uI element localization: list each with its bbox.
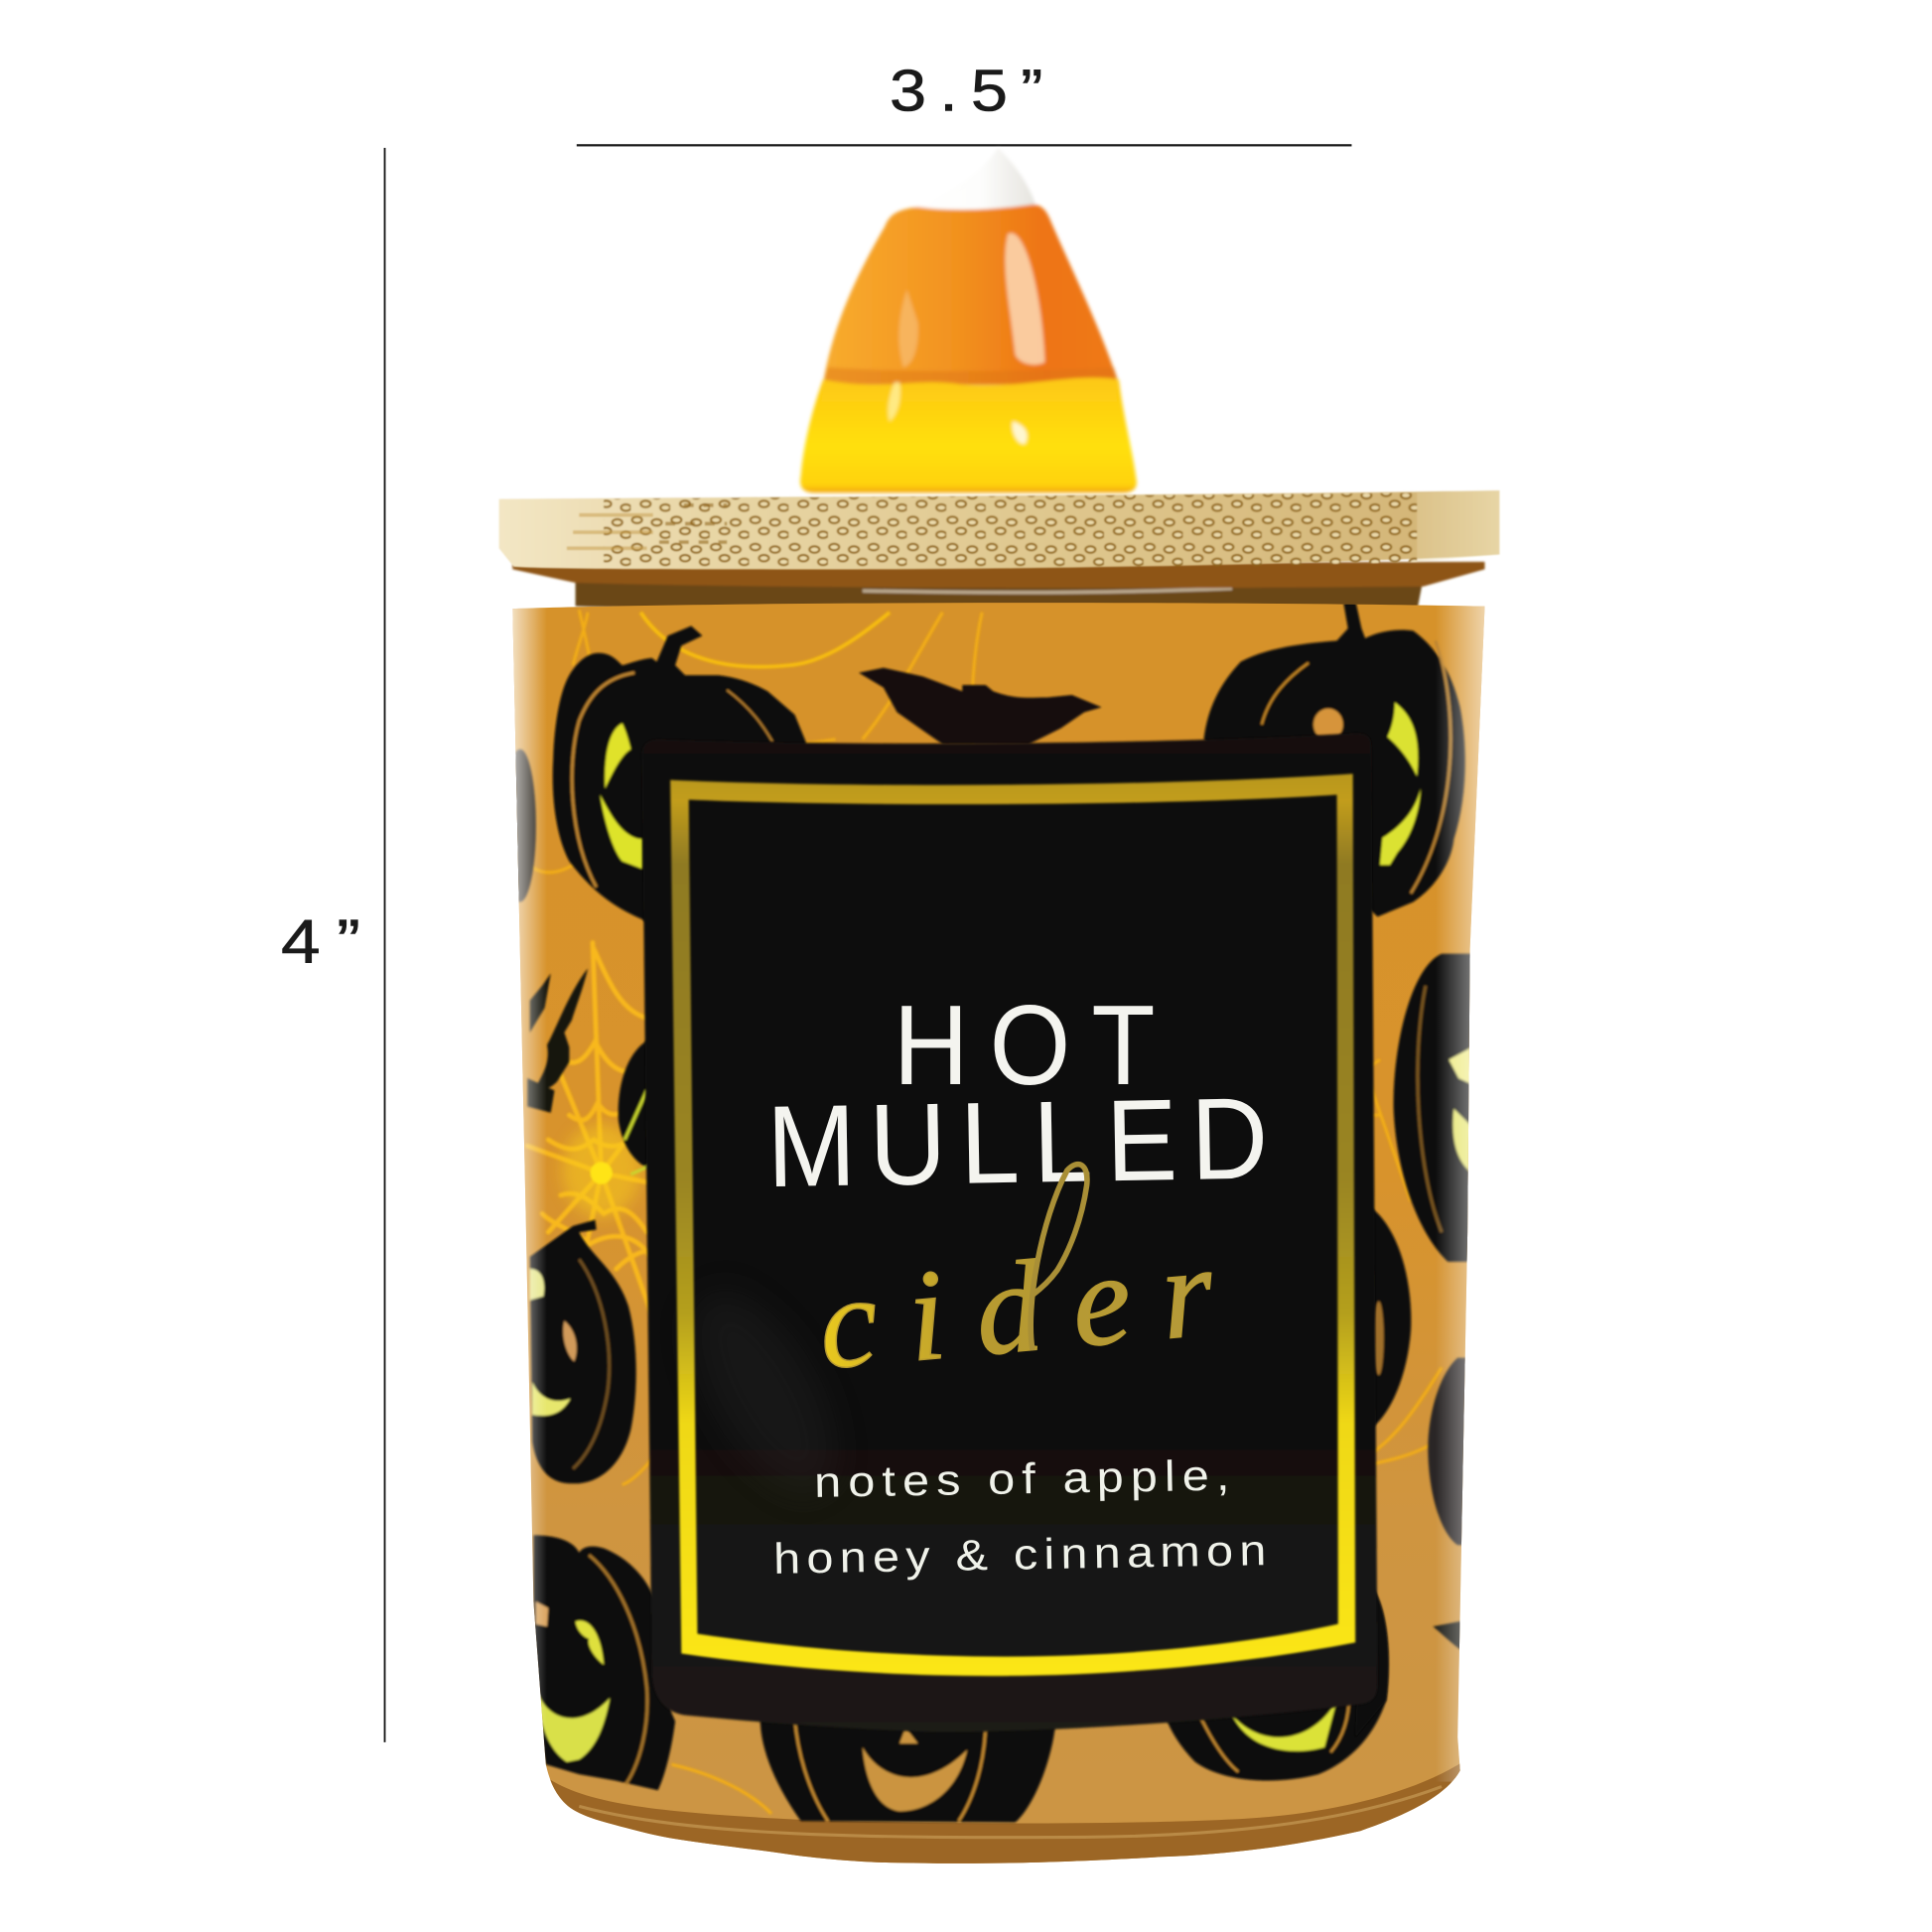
text: HOT: HOT (894, 983, 1156, 1109)
jar glass base colour (505, 599, 1491, 1872)
icon: spider web left (527, 942, 653, 1318)
icon: bat right (1432, 1620, 1459, 1650)
height dimension line (384, 148, 385, 1742)
icon: pumpkin top right (1204, 600, 1465, 916)
bamboo lid (499, 490, 1499, 570)
icon: bats left (527, 968, 588, 1113)
icon: pumpkin left bottom (533, 1535, 675, 1790)
icon: pumpkin left edge (515, 749, 538, 903)
icon: pumpkin right lower (1426, 1356, 1465, 1547)
jar body with pumpkin pattern (504, 599, 1491, 1885)
bottom rim (550, 1763, 1460, 1863)
icon: pumpkin bottom centre (760, 1719, 1056, 1823)
text: cider: cider (813, 1219, 1219, 1397)
icon: pumpkin right middle (1394, 954, 1478, 1262)
candle jar (499, 148, 1499, 1885)
label gloss (666, 1272, 862, 1513)
label background (642, 733, 1378, 1732)
text: honey and cinnamon: honey & cinnamon (773, 1526, 1267, 1583)
spider webs (517, 610, 1442, 1814)
width dimension line (577, 144, 1351, 146)
icon: pumpkin bottom right (1165, 1578, 1388, 1780)
icon: pumpkin behind web (619, 1037, 653, 1174)
text: notes of apple: notes of apple, (814, 1450, 1230, 1506)
icon: candy corn lid topper (800, 148, 1137, 492)
icon: pumpkin top left (553, 625, 806, 936)
width label: 3.5” (890, 59, 1042, 124)
height label: 4” (281, 907, 360, 976)
jar neck (512, 562, 1484, 613)
icon: pumpkin left middle (530, 1220, 636, 1483)
text: MULLED: MULLED (765, 1073, 1269, 1211)
jar edge fade (505, 599, 1484, 1782)
product label (642, 733, 1378, 1732)
icon: pumpkin beside label (1372, 1208, 1413, 1706)
gold frame (670, 773, 1355, 1676)
icon: bat top (859, 668, 1102, 745)
